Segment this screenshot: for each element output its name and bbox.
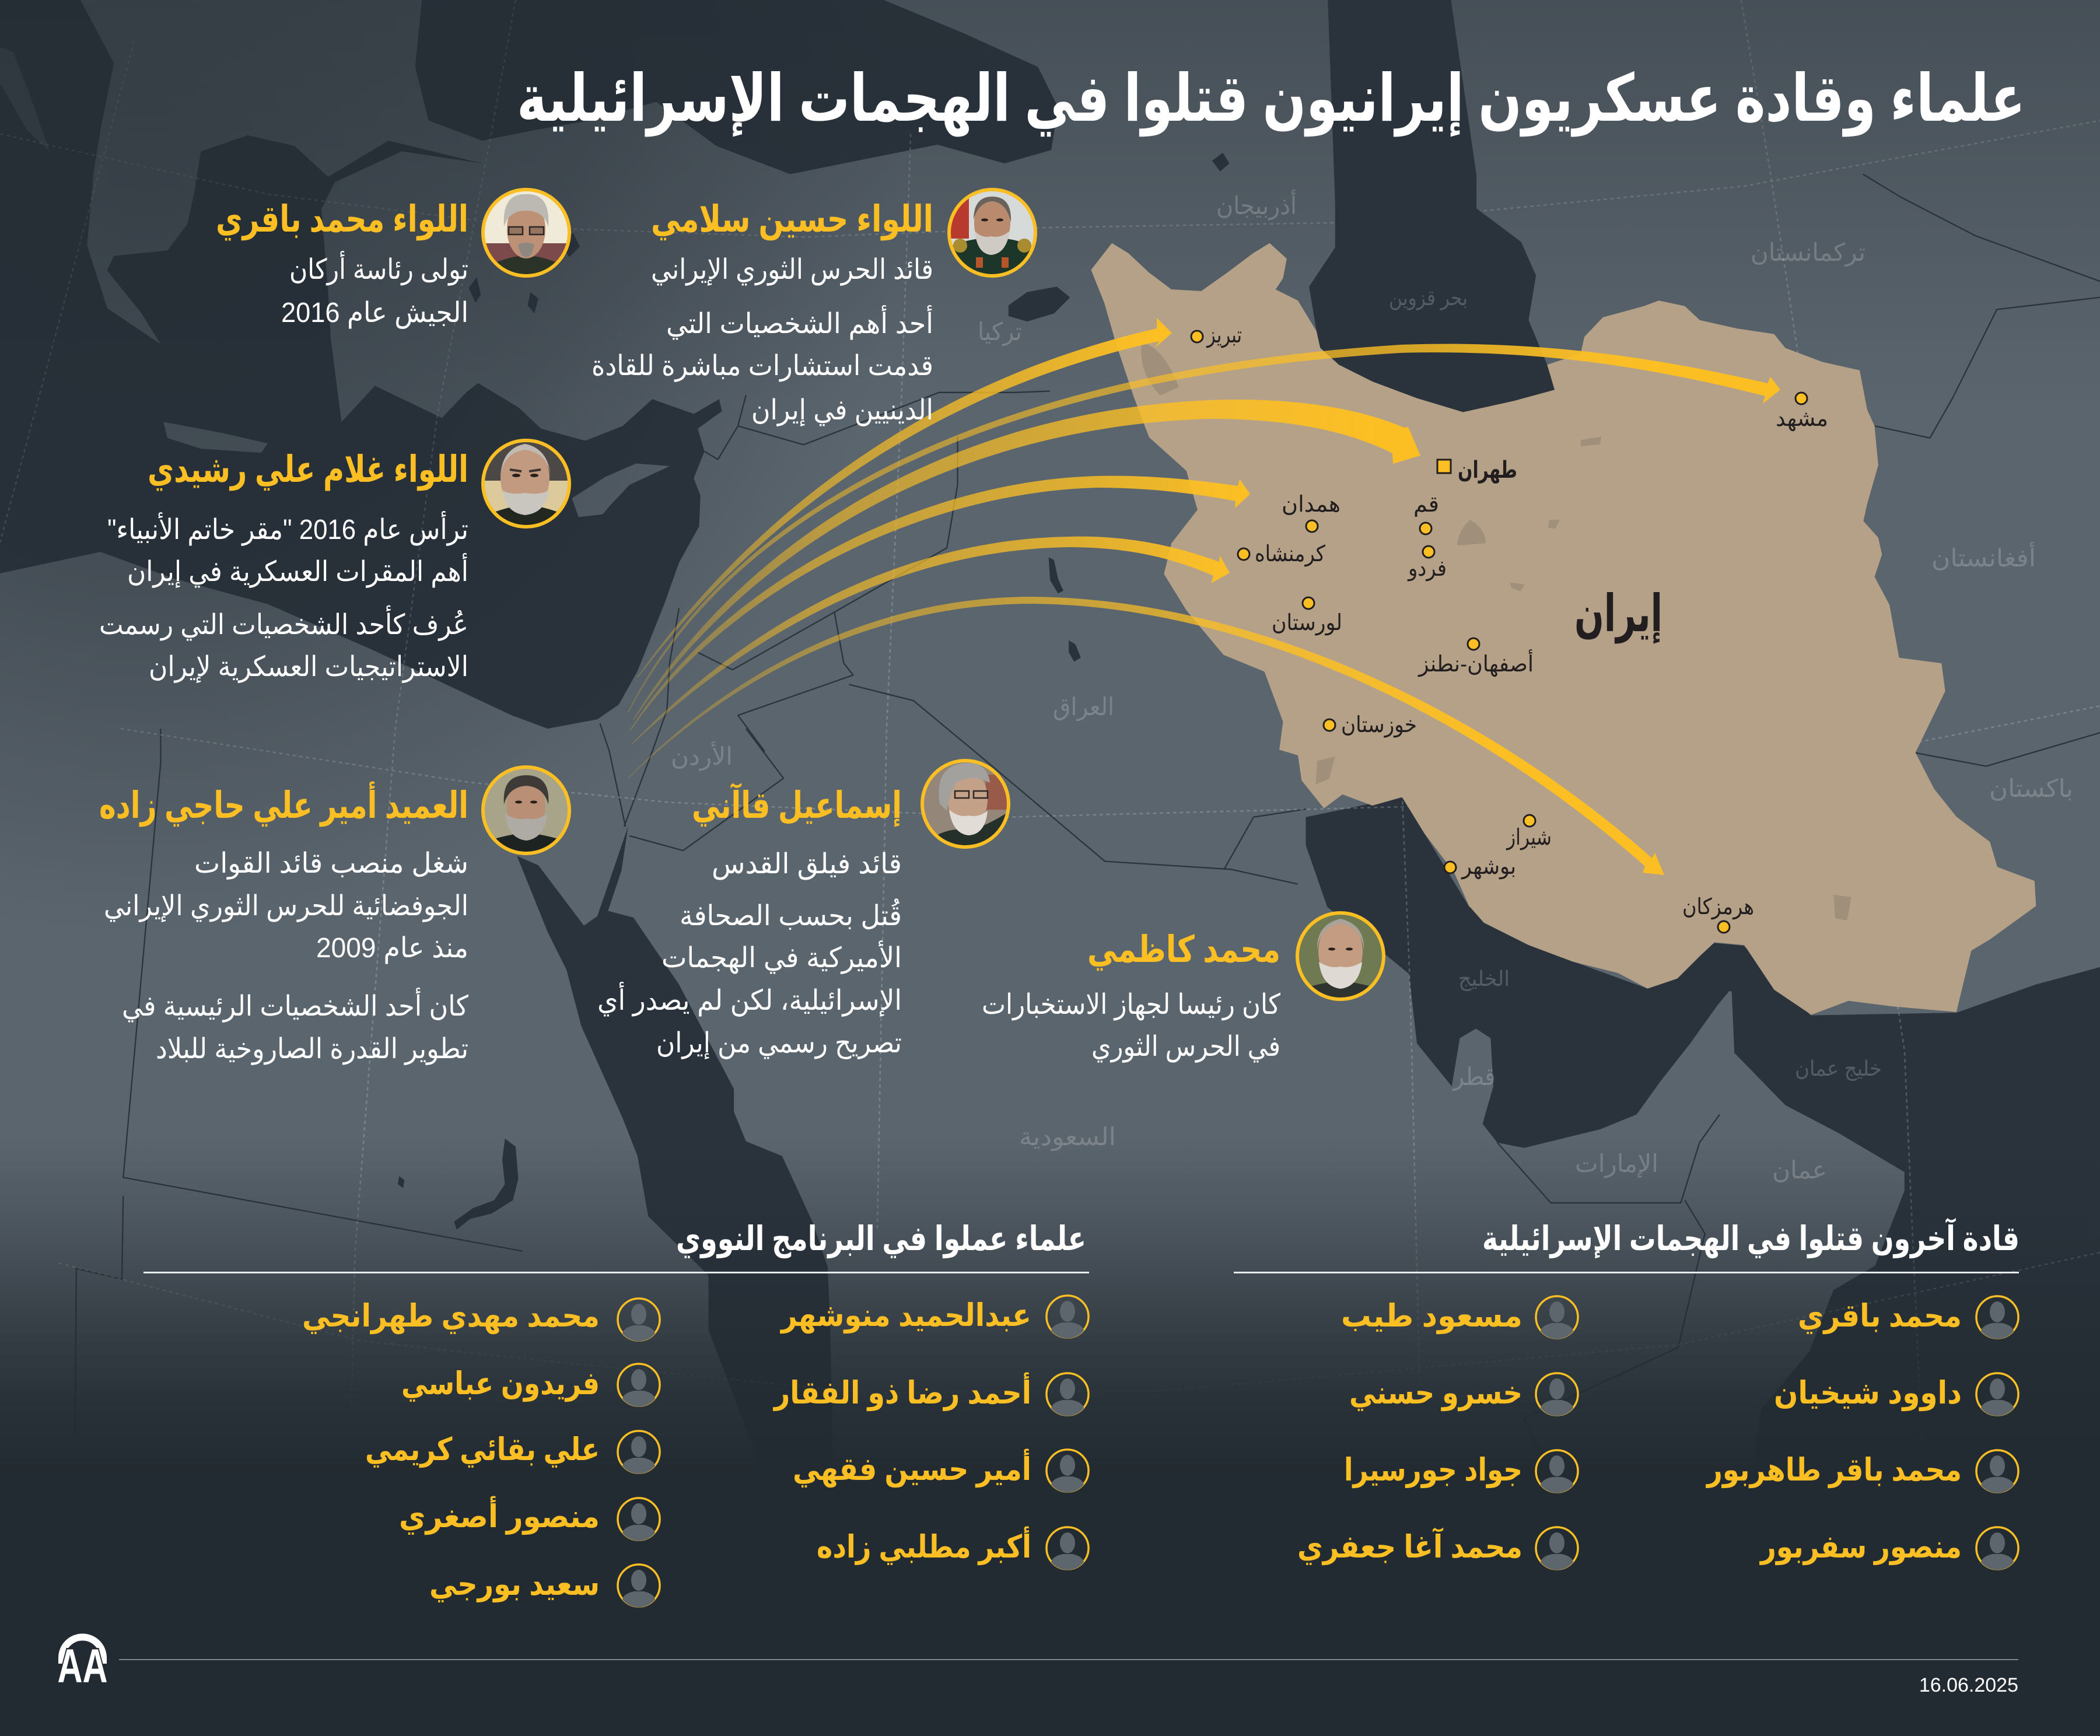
city markers and labels xyxy=(1191,323,1828,933)
item: Mohammad Mehdi Tehranchi: محمد مهدي طهرانجي xyxy=(302,1298,600,1334)
Lorestan: لورستان xyxy=(1272,611,1342,636)
Hormozgan xyxy=(1682,895,1754,933)
Crete xyxy=(163,422,268,453)
bio: Salami: قائد الحرس الثوري الإيراني xyxy=(651,254,933,286)
geographic labels: الخليج xyxy=(1458,967,1510,991)
bio: Rashidi xyxy=(99,511,468,683)
Hamedan: همدان xyxy=(1282,492,1340,517)
profile: Mohammad Bagheri xyxy=(216,186,573,329)
Hormozgan: هرمزكان xyxy=(1682,895,1754,920)
Iran salt lakes xyxy=(1141,342,1852,921)
bio: Qaani: تصريح رسمي من إيران xyxy=(656,1028,902,1059)
bio: Kazemi: في الحرس الثوري xyxy=(1091,1031,1280,1063)
geographic labels: قطر xyxy=(1452,1063,1496,1091)
item: Mohammad Agha Jafari: محمد آغا جعفري xyxy=(1297,1527,1522,1565)
country label: Iran: إيران xyxy=(1574,584,1662,644)
Qom xyxy=(1413,492,1439,534)
item: Khosrow Hassani: خسرو حسني xyxy=(1349,1376,1522,1411)
heading rule xyxy=(144,1272,1089,1273)
country borders xyxy=(75,174,2100,1452)
portrait: Kazemi xyxy=(1294,909,1387,1003)
item: Masoud Tayyeb: مسعود طيب xyxy=(1341,1298,1522,1334)
bio: Hajizadeh: الجوفضائية للحرس الثوري الإيراني xyxy=(104,891,468,922)
name: Rashidi: اللواء غلام علي رشيدي xyxy=(148,449,468,491)
name: Hajizadeh: العميد أمير علي حاجي زاده xyxy=(99,781,468,827)
item: Saeed Borji xyxy=(429,1564,660,1607)
item: Davoud Sheikhian xyxy=(1774,1373,2018,1416)
Tabriz: تبريز xyxy=(1206,323,1242,348)
Persian Gulf and Arabian Sea xyxy=(1306,797,2100,1736)
Black Sea xyxy=(415,0,1058,174)
logo: AA: AA xyxy=(57,1640,107,1693)
arrow to Tabriz xyxy=(637,318,1172,677)
item: Akbar Motallebizadeh: أكبر مطلبي زاده xyxy=(817,1526,1031,1565)
portrait: Hajizadeh xyxy=(480,764,573,857)
bio: Kazemi xyxy=(982,989,1280,1063)
name: Kazemi: محمد كاظمي xyxy=(1087,929,1280,971)
Mashhad xyxy=(1776,393,1828,432)
bio: Hajizadeh: منذ عام 2009 xyxy=(316,933,468,964)
Shiraz: شيراز xyxy=(1506,825,1552,850)
geographic labels: الأردن xyxy=(671,741,733,771)
geographic labels: السعودية xyxy=(1019,1123,1116,1151)
heading rule xyxy=(1234,1272,2019,1273)
bio: Qaani: الأميركية في الهجمات xyxy=(662,940,902,974)
Khuzestan: خوزستان xyxy=(1341,713,1417,738)
item: Davoud Sheikhian: داوود شيخيان xyxy=(1774,1376,1962,1411)
bio: Bagheri xyxy=(281,251,468,329)
Italy xyxy=(0,47,50,151)
geographic labels: أذربيجان xyxy=(1216,190,1297,220)
portrait: Qaani xyxy=(919,757,1012,850)
item: Masoud Tayyeb xyxy=(1341,1296,1578,1339)
Qom: قم xyxy=(1413,492,1439,517)
panel: nuclear scientists xyxy=(144,1220,1089,1607)
geographic labels: عمان xyxy=(1772,1156,1827,1184)
upper and left map shading xyxy=(0,0,2100,408)
item: Fereydoon Abbasi: فريدون عباسي xyxy=(401,1366,600,1402)
bio: Qaani xyxy=(597,849,902,1059)
Isfahan-Natanz xyxy=(1418,638,1534,677)
Shiraz xyxy=(1506,815,1552,850)
geographic labels: خليج عمان xyxy=(1795,1056,1882,1081)
date: 16.06.2025 xyxy=(1919,1674,2018,1696)
geographic labels xyxy=(671,190,2073,1184)
arrow to Kermanshah xyxy=(631,537,1230,744)
name: Salami: اللواء حسين سلامي xyxy=(651,199,933,241)
bio: Kazemi: كان رئيسا لجهاز الاستخبارات xyxy=(982,989,1280,1021)
bio: Rashidi: أهم المقرات العسكرية في إيران xyxy=(127,553,468,588)
bio: Hajizadeh: كان أحد الشخصيات الرئيسية في xyxy=(122,988,468,1023)
name: Qaani: إسماعيل قاآني xyxy=(692,782,902,827)
Bushehr xyxy=(1444,855,1516,880)
bio: Salami: الدينيين في إيران xyxy=(751,395,933,426)
Lorestan xyxy=(1272,597,1342,636)
panel: other commanders xyxy=(1234,1217,2020,1570)
lakes xyxy=(398,153,1230,1230)
profile: Esmail Qaani xyxy=(597,757,1012,1059)
Hamedan xyxy=(1282,492,1340,532)
item: Abdolhamid Minouchehr: عبدالحميد منوشهر xyxy=(779,1298,1031,1334)
Bushehr: بوشهر xyxy=(1461,855,1516,880)
portrait: Rashidi xyxy=(480,437,573,530)
bio: Hajizadeh: تطوير القدرة الصاروخية للبلاد xyxy=(156,1034,468,1065)
profile: Hossein Salami xyxy=(592,186,1039,426)
bio: Bagheri: تولى رئاسة أركان xyxy=(289,251,468,286)
bio: Salami: أحد أهم الشخصيات التي xyxy=(666,305,933,340)
Tabriz xyxy=(1191,323,1242,348)
profile: Amir Ali Hajizadeh xyxy=(99,764,573,1065)
item: Mansour Safarpour: منصور سفربور xyxy=(1759,1530,1962,1565)
item: Saeed Borji: سعيد بورجي xyxy=(429,1567,600,1602)
Caspian Sea xyxy=(1309,0,1555,412)
bio: Qaani: قائد فيلق القدس xyxy=(712,849,902,880)
geographic labels: العراق xyxy=(1053,693,1114,721)
item: Javad Jorsara: جواد جورسيرا xyxy=(1344,1452,1522,1488)
Fordow xyxy=(1407,546,1447,582)
Fordow: فردو xyxy=(1407,556,1447,582)
item: Mohammad Bagheri: محمد باقري xyxy=(1798,1298,1962,1334)
item: Ali Baghaei Karimi: علي بقائي كريمي xyxy=(365,1432,600,1468)
Tehran: طهران xyxy=(1458,457,1517,484)
bio: Rashidi: ترأس عام 2016 "مقر خاتم الأنبياء" xyxy=(107,511,468,546)
profile: Mohammad Kazemi xyxy=(982,909,1387,1063)
bio: Bagheri: الجيش عام 2016 xyxy=(281,298,468,329)
item: Mohammad Bagher Taherpour: محمد باقر طاهربور xyxy=(1705,1452,1962,1488)
item: Ahmad Reza Zolfaghari: أحمد رضا ذو الفقار xyxy=(772,1372,1031,1411)
Kermanshah: كرمنشاه xyxy=(1255,542,1326,567)
bio: Qaani: قُتل بحسب الصحافة xyxy=(680,898,902,932)
portrait: Bagheri xyxy=(480,186,573,279)
item: Mansour Asgari xyxy=(399,1496,660,1541)
Isfahan-Natanz: أصفهان-نطنز xyxy=(1418,649,1534,677)
bio: Hajizadeh: شغل منصب قائد القوات xyxy=(194,848,468,880)
geographic labels: تركيا xyxy=(978,318,1022,346)
bio: Qaani: الإسرائيلية، لكن لم يصدر أي xyxy=(597,982,902,1017)
Red Sea xyxy=(517,827,833,1474)
bio: Hajizadeh xyxy=(104,848,468,1065)
profile: Gholam Ali Rashid xyxy=(99,437,573,683)
geographic labels: تركمانستان xyxy=(1751,239,1866,267)
Cyprus xyxy=(572,464,670,517)
arrow to Tehran xyxy=(633,400,1420,720)
attack arrows xyxy=(628,318,1780,875)
arrow to Hamedan xyxy=(629,476,1250,731)
portrait: Salami xyxy=(946,186,1039,279)
footer rule xyxy=(119,1659,2018,1660)
geographic labels: بحر قزوين xyxy=(1389,286,1468,310)
Tehran xyxy=(1437,457,1517,484)
bottom fade xyxy=(0,1138,2100,1474)
item: Mohammad Bagheri xyxy=(1798,1296,2018,1339)
bio: Salami: قدمت استشارات مباشرة للقادة xyxy=(592,351,933,382)
arrow to Mashhad xyxy=(628,344,1780,712)
bio: Salami xyxy=(592,254,933,426)
arrow to Hormozgan xyxy=(628,597,1664,875)
bio: Rashidi: الاستراتيجيات العسكرية لإيران xyxy=(149,652,468,683)
bio: Rashidi: عُرف كأحد الشخصيات التي رسمت xyxy=(99,605,468,641)
item: Amir Hossein Feghhi: أمير حسين فقهي xyxy=(793,1448,1031,1488)
Mediterranean and Aegean xyxy=(0,0,722,729)
name: Bagheri: اللواء محمد باقري xyxy=(216,199,468,241)
item: Mansour Asgari: منصور أصغري xyxy=(399,1496,600,1535)
heading: nuclear scientists: علماء عملوا في البرنامج النووي xyxy=(676,1220,1086,1259)
geographic labels: باكستان xyxy=(1989,775,2073,802)
Mashhad: مشهد xyxy=(1776,407,1828,432)
geographic labels: أفغانستان xyxy=(1931,542,2036,572)
map: Iran and Caspian Sea xyxy=(1091,0,2036,1015)
Iran land shape xyxy=(1091,243,2036,1015)
geographic labels: الإمارات xyxy=(1575,1150,1658,1178)
